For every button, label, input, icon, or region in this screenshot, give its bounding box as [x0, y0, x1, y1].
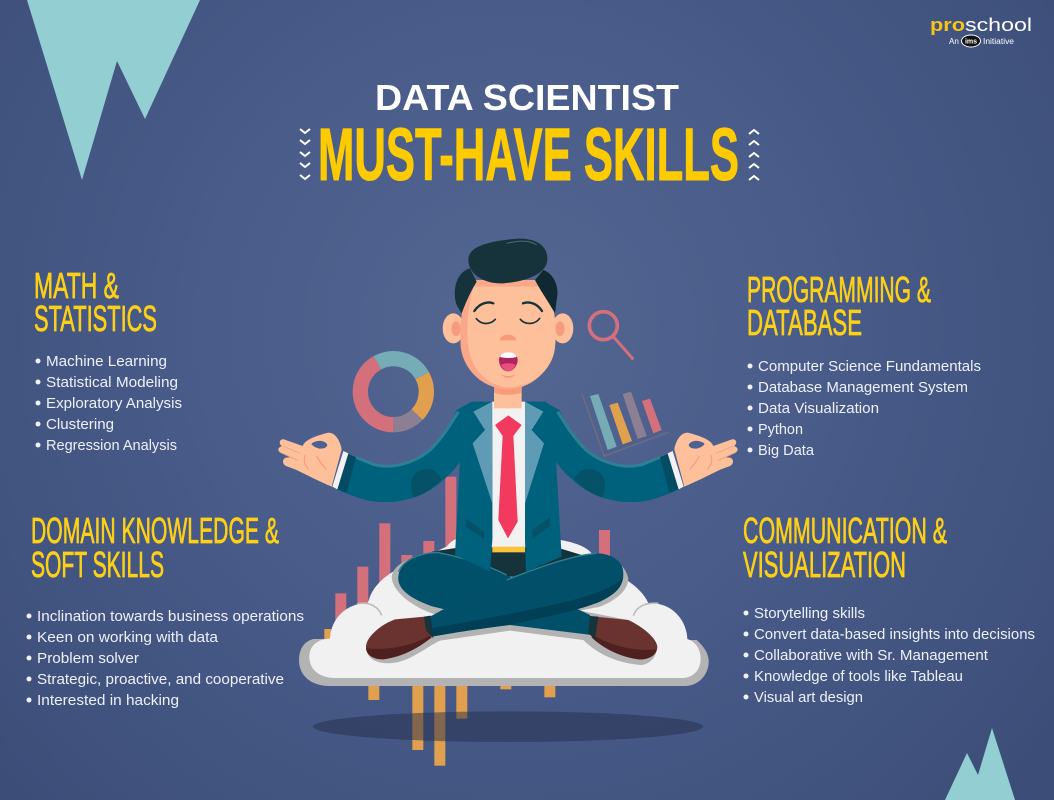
skill list: Exploratory Analysis: [46, 395, 182, 412]
title line: must-have skills: MUST-HAVE SKILLS: [318, 113, 739, 196]
skill list: Clustering: [46, 416, 114, 433]
illustration: background bars, cloud and lower body: [299, 477, 709, 766]
logo: proschool: school: [965, 15, 1032, 35]
icon: down chevrons: [300, 129, 310, 179]
icon: bottom-right peaks: [945, 728, 1015, 800]
tie: [495, 415, 522, 538]
skill list: Regression Analysis: [46, 437, 177, 454]
heading: [743, 510, 947, 585]
heading: DOMAIN KNOWLEDGE &: [31, 510, 279, 551]
skill list: [26, 608, 304, 709]
shirt: [492, 402, 525, 540]
shoes: [366, 617, 657, 659]
logo: proschool: Initiative: [983, 37, 1015, 46]
heading: DATABASE: [747, 302, 862, 343]
panel: domain knowledge and soft skills: [26, 510, 304, 709]
belt and waist: [432, 547, 582, 577]
floating icons: [360, 312, 668, 456]
title: [300, 77, 759, 196]
logo: proschool: [930, 15, 1032, 47]
hair: [455, 239, 558, 313]
skill list: Big Data: [758, 442, 815, 459]
icon: up chevrons: [749, 130, 759, 180]
cloud: [299, 537, 709, 686]
skill list: Visual art design: [754, 689, 863, 706]
icon: top-left icicles: [27, 0, 200, 180]
skill list: Storytelling skills: [754, 605, 865, 622]
panel: programming and database: [747, 269, 981, 459]
logo: proschool: ims: [965, 38, 977, 46]
heading: PROGRAMMING &: [747, 269, 931, 310]
logo: proschool: pro: [930, 15, 965, 35]
left arm: [332, 402, 472, 502]
head: [443, 239, 573, 425]
title line: data scientist: DATA SCIENTIST: [375, 77, 679, 118]
figure: meditating man: [278, 239, 738, 659]
heading: SOFT SKILLS: [31, 544, 164, 585]
skill list: Statistical Modeling: [46, 374, 178, 391]
heading: [747, 269, 931, 343]
right hand: [674, 433, 738, 487]
jacket: [455, 402, 562, 572]
face: [460, 280, 556, 389]
skill list: Knowledge of tools like Tableau: [754, 668, 963, 685]
skill list: Data Visualization: [758, 400, 879, 417]
jacket lapels: [473, 402, 544, 503]
panel: math and statistics: [34, 265, 182, 454]
skill list: Problem solver: [37, 650, 139, 667]
skill list: [748, 358, 981, 459]
nose: [500, 335, 516, 340]
tilted bar chart: [582, 392, 668, 456]
skill list: [744, 605, 1035, 706]
heading: [34, 265, 157, 339]
skill list: Computer Science Fundamentals: [758, 358, 981, 375]
skill list: [36, 353, 182, 454]
left hand: [278, 433, 342, 487]
ears: [443, 313, 573, 343]
cloud shadow on ground: [313, 711, 703, 742]
skill list: Strategic, proactive, and cooperative: [37, 671, 284, 688]
heading: VISUALIZATION: [743, 544, 906, 585]
panel: communication and visualization: [743, 510, 1035, 706]
neck: [492, 383, 524, 425]
body: [332, 402, 684, 659]
skill list: Python: [758, 421, 803, 438]
heading: MATH &: [34, 265, 119, 306]
skill list: Convert data-based insights into decisions: [754, 626, 1035, 643]
donut chart: [360, 359, 426, 425]
skill list: Machine Learning: [46, 353, 167, 370]
skill list: Collaborative with Sr. Management: [754, 647, 989, 664]
chart: orange bars: [324, 629, 555, 766]
skill list: Interested in hacking: [37, 692, 179, 709]
skill list: Keen on working with data: [37, 629, 219, 646]
mouth: [499, 352, 518, 378]
skill list: Database Management System: [758, 379, 968, 396]
leg and shoe shadow: [366, 553, 657, 665]
skill list: Inclination towards business operations: [37, 608, 304, 625]
eyebrows and eyes: [474, 303, 542, 324]
heading: STATISTICS: [34, 298, 157, 339]
right arm: [544, 402, 684, 502]
icon: magnifying glass: [589, 312, 633, 359]
heading: [31, 510, 279, 585]
legs: [398, 552, 623, 639]
logo: proschool: An: [949, 37, 959, 46]
chart: pink bars: [335, 477, 610, 620]
